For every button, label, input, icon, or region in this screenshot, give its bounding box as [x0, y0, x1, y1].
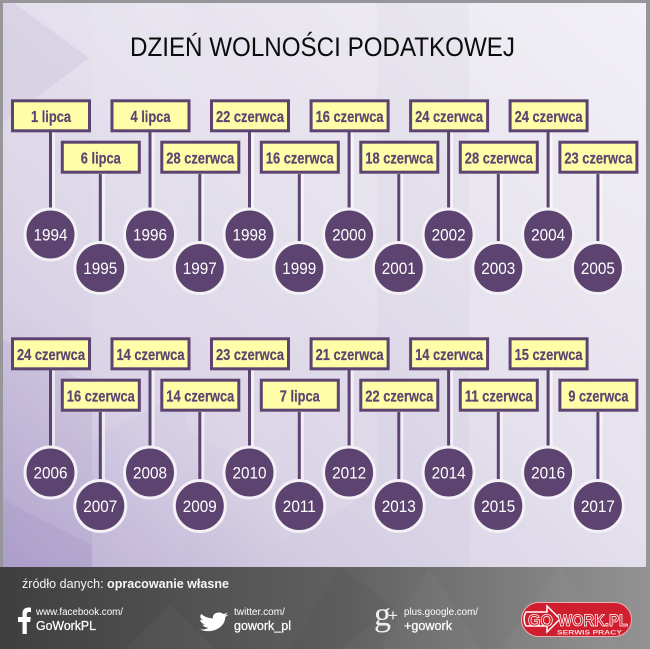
item 2006: 24 czerwca — [17, 347, 85, 364]
item 2017: 2017 — [581, 497, 615, 516]
footer panel — [0, 567, 650, 649]
item 2013 — [361, 380, 438, 532]
facebook link: GoWorkPL — [36, 618, 96, 633]
google plus link: plus.google.com/ — [404, 606, 478, 618]
item 2004 — [510, 101, 587, 260]
item 2016: 15 czerwca — [515, 347, 583, 364]
item 1995: 1995 — [83, 259, 117, 278]
facebook link — [35, 606, 123, 633]
item 2003: 2003 — [481, 259, 515, 278]
item 1994: 1994 — [34, 226, 68, 244]
item 2004: 2004 — [531, 226, 565, 244]
item 2014 — [411, 339, 488, 498]
twitter link: twitter.com/ — [234, 606, 285, 618]
item 1998: 22 czerwca — [216, 109, 284, 126]
item 1999 — [261, 142, 338, 294]
item 1997 — [162, 142, 239, 294]
google plus link — [404, 606, 478, 633]
item 2015: 11 czerwca — [465, 388, 533, 406]
item 1994 — [12, 101, 90, 260]
item 2002 — [411, 101, 488, 260]
item 2008 — [112, 339, 189, 498]
facebook link: www.facebook.com/ — [35, 606, 123, 618]
item 1997: 28 czerwca — [166, 150, 234, 168]
item 2007: 2007 — [83, 497, 117, 516]
google plus link: +gowork — [404, 618, 452, 633]
item 2007: 16 czerwca — [67, 388, 135, 406]
item 1999: 1999 — [282, 259, 316, 278]
item 2011: 7 lipca — [280, 388, 320, 406]
twitter link — [234, 606, 291, 633]
item 2013: 22 czerwca — [365, 388, 433, 406]
timeline row 2 — [12, 339, 637, 532]
item 2012 — [311, 339, 388, 498]
source note: źródło danych: opracowanie własne — [22, 576, 229, 591]
item 2003 — [460, 142, 537, 294]
item 2015 — [460, 380, 537, 532]
item 2012: 2012 — [332, 464, 366, 482]
item 1999: 16 czerwca — [266, 150, 334, 168]
item 1995 — [62, 142, 139, 294]
item 2000: 16 czerwca — [316, 109, 384, 126]
item 2008: 2008 — [133, 464, 167, 482]
item 2005 — [560, 142, 637, 294]
item 2003: 28 czerwca — [465, 150, 533, 168]
item 2011: 2011 — [283, 497, 316, 516]
item 2001 — [361, 142, 438, 294]
item 2016: 2016 — [531, 464, 565, 482]
item 2004: 24 czerwca — [515, 109, 583, 126]
item 2017: 9 czerwca — [568, 388, 628, 406]
title: DZIEŃ WOLNOŚCI PODATKOWEJ — [130, 30, 515, 62]
item 2001: 2001 — [382, 259, 416, 278]
item 2015: 2015 — [481, 497, 515, 516]
item 2011 — [261, 380, 338, 532]
item 2009: 14 czerwca — [166, 388, 234, 406]
item 1996: 4 lipca — [130, 109, 171, 126]
icon: google plus: + — [388, 606, 398, 625]
item 2009: 2009 — [183, 497, 217, 516]
logo: gowork.pl: SERWIS PRACY — [557, 630, 623, 636]
item 2006 — [12, 339, 90, 498]
item 2012: 21 czerwca — [316, 347, 384, 364]
icon: facebook — [18, 608, 31, 634]
logo: gowork.pl: WORK.PL — [558, 611, 628, 630]
item 2014: 14 czerwca — [415, 347, 483, 364]
logo: gowork.pl — [522, 602, 632, 636]
item 1998: 1998 — [232, 226, 266, 244]
item 2002: 2002 — [432, 226, 466, 244]
item 1997: 1997 — [183, 259, 217, 278]
item 2005: 23 czerwca — [564, 150, 632, 168]
item 2010: 23 czerwca — [216, 347, 284, 364]
icon: google plus: g — [374, 596, 391, 634]
item 1995: 6 lipca — [81, 150, 121, 168]
twitter link: gowork_pl — [234, 618, 291, 633]
item 2010 — [212, 339, 288, 498]
item 1994: 1 lipca — [31, 109, 71, 126]
item 2009 — [162, 380, 239, 532]
item 2016 — [510, 339, 587, 498]
item 2014: 2014 — [432, 464, 466, 482]
item 2006: 2006 — [34, 464, 68, 482]
item 2001: 18 czerwca — [365, 150, 433, 168]
timeline row 1 — [12, 101, 637, 294]
item 2007 — [62, 380, 139, 532]
item 1998 — [212, 101, 288, 260]
item 2005: 2005 — [581, 259, 615, 278]
item 1996: 1996 — [133, 226, 167, 244]
item 2010: 2010 — [232, 464, 266, 482]
logo: gowork.pl: GO — [528, 611, 553, 630]
item 2008: 14 czerwca — [116, 347, 185, 364]
item 2000 — [311, 101, 388, 260]
item 2002: 24 czerwca — [415, 109, 483, 126]
item 1996 — [112, 101, 189, 260]
icon: twitter bird — [199, 613, 228, 631]
item 2000: 2000 — [332, 226, 366, 244]
item 2013: 2013 — [382, 497, 416, 516]
item 2017 — [560, 380, 637, 532]
